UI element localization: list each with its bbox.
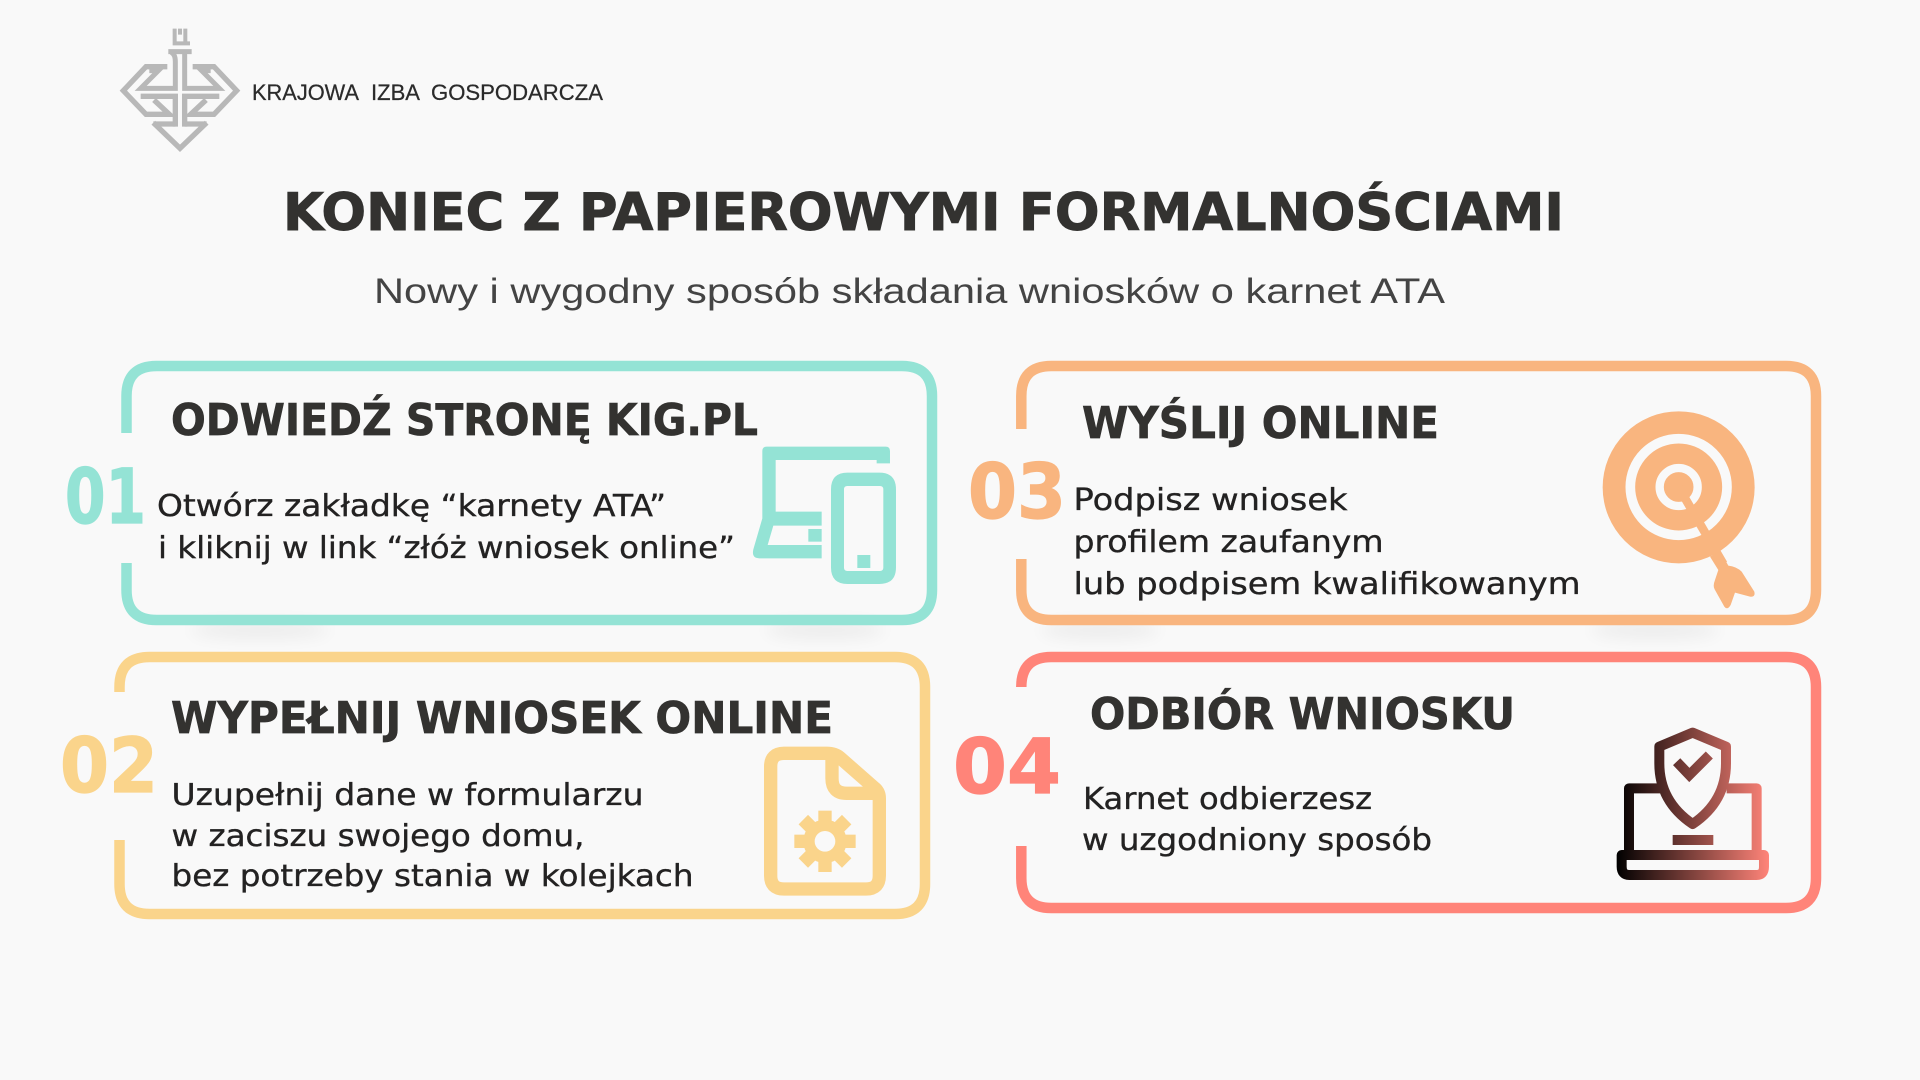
logo: Krajowa Izba Gospodarcza (123, 29, 603, 148)
description: Karnet odbierzesz (1083, 782, 1372, 817)
description: bez potrzeby stania w kolejkach (172, 859, 694, 894)
description: w uzgodniony sposób (1082, 823, 1432, 858)
logo wordmark (252, 80, 603, 105)
heading: ODBIÓR WNIOSKU (1090, 687, 1515, 740)
heading: ODWIEDŹ STRONĘ KIG.PL (171, 393, 758, 446)
panel border (126, 366, 932, 620)
panel border (1021, 657, 1816, 908)
subtitle: Nowy i wygodny sposób składania wniosków o karnet ATA (374, 272, 1446, 311)
panel border (120, 657, 925, 914)
description (172, 778, 694, 894)
panel: step 02 (60, 657, 925, 914)
step number: 01 (65, 452, 146, 541)
icon: laptop with shield (1622, 733, 1764, 875)
description: i kliknij w link “złóż wniosek online” (158, 531, 735, 566)
step number: 02 (60, 721, 158, 810)
panel: step 03 (968, 366, 1816, 620)
description (1082, 782, 1432, 858)
icon: logo emblem (123, 29, 237, 148)
description: Otwórz zakładkę “karnety ATA” (157, 489, 666, 524)
heading: WYPEŁNIJ WNIOSEK ONLINE (171, 693, 833, 744)
icon: document with gear (771, 753, 879, 889)
description: w zaciszu swojego domu, (172, 819, 584, 854)
description (157, 489, 735, 566)
logo wordmark: KRAJOWA (252, 80, 359, 105)
panel: step 04 (953, 657, 1816, 908)
title: KONIEC Z PAPIEROWYMI FORMALNOŚCIAMI (283, 181, 1564, 243)
description: Podpisz wniosek (1074, 483, 1348, 518)
logo wordmark: GOSPODARCZA (431, 80, 603, 105)
icon: target with arrow (1603, 411, 1755, 608)
step number: 03 (968, 447, 1066, 536)
description: profilem zaufanym (1074, 525, 1384, 560)
panel border (1021, 366, 1816, 620)
description: Uzupełnij dane w formularzu (172, 778, 644, 813)
panel: step 01 (65, 366, 932, 620)
icon: laptop and phone (753, 447, 896, 584)
description: lub podpisem kwalifikowanym (1074, 567, 1580, 602)
logo wordmark: IZBA (371, 80, 420, 105)
step number: 04 (953, 722, 1061, 811)
description (1074, 483, 1580, 602)
heading: WYŚLIJ ONLINE (1082, 396, 1439, 449)
